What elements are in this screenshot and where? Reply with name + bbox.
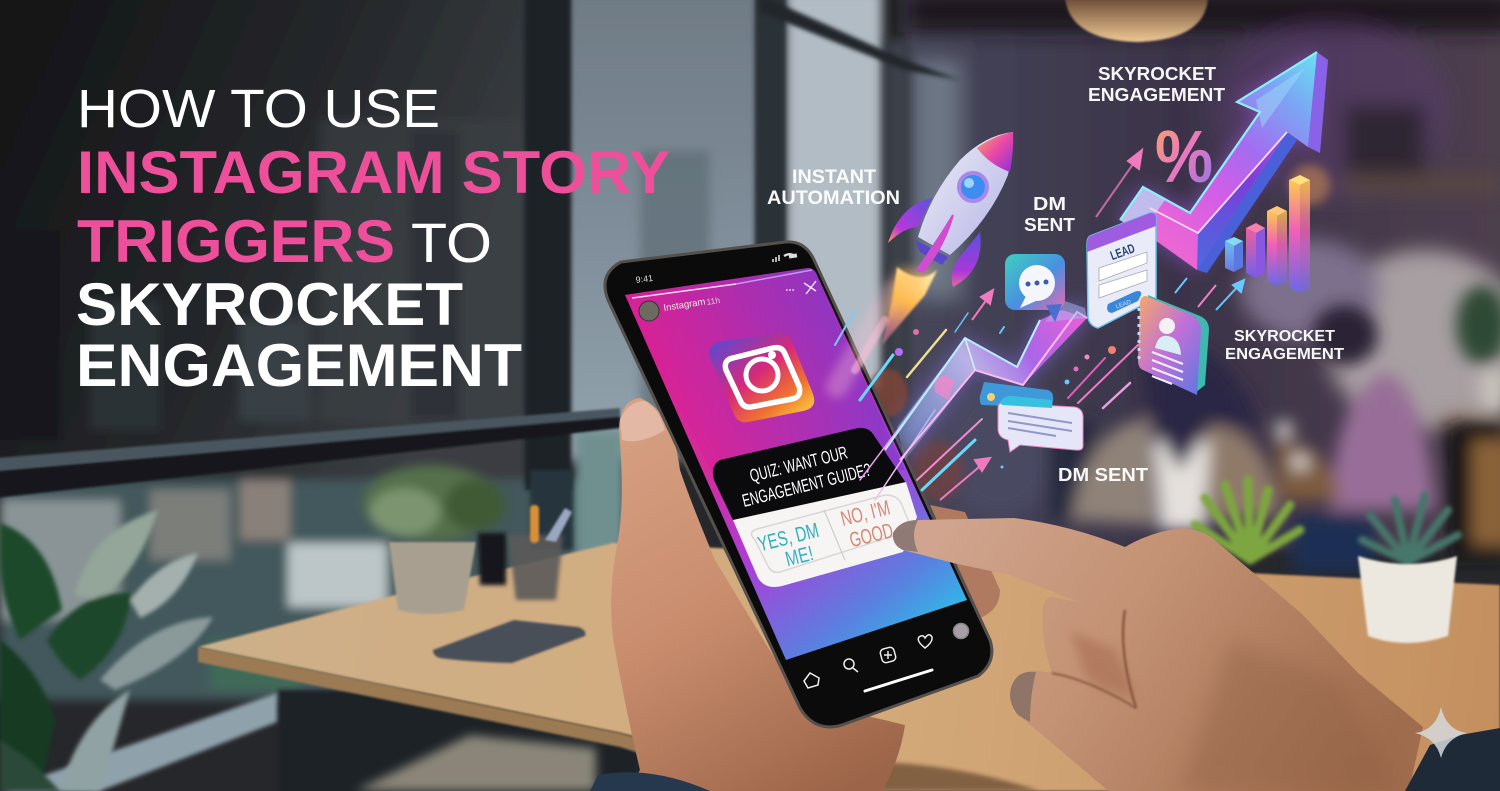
bar chart xyxy=(1225,165,1330,293)
quiz card: NO, I'M xyxy=(838,496,892,531)
left hand holding phone xyxy=(590,369,1000,791)
status bar: 9:41 xyxy=(635,273,654,285)
rocket xyxy=(888,132,1013,287)
label: skyrocket engagement lower xyxy=(1225,328,1345,363)
title: TO xyxy=(411,211,492,274)
percent symbol: % xyxy=(1155,115,1213,198)
title xyxy=(76,79,670,399)
label: skyrocket engagement lower: ENGAGEMENT xyxy=(1225,346,1345,363)
fingernail xyxy=(893,520,918,552)
status bar xyxy=(635,253,797,285)
label: dm sent upper: SENT xyxy=(1024,215,1075,235)
sparkle dots xyxy=(895,329,1116,468)
label: skyrocket engagement lower: SKYROCKET xyxy=(1234,328,1336,345)
contact book xyxy=(1138,295,1209,395)
holographic growth graphic xyxy=(835,52,1330,500)
label: dm sent upper: DM xyxy=(1033,194,1066,214)
label: instant automation: AUTOMATION xyxy=(767,188,900,209)
arrow 3D right face xyxy=(1308,52,1328,153)
small arrows xyxy=(940,150,1244,500)
table xyxy=(198,543,1500,791)
label: instant automation xyxy=(767,167,900,209)
label: dm sent upper xyxy=(1024,194,1075,235)
quiz card: QUIZ: WANT OUR xyxy=(748,442,849,486)
lead form card: LEAD xyxy=(1115,299,1133,311)
story header: Instagram xyxy=(663,296,706,314)
label: skyrocket engagement top xyxy=(1088,64,1225,105)
bottom nav icons xyxy=(804,624,968,691)
pendant lamp xyxy=(1065,0,1208,42)
story header: 11h xyxy=(706,295,721,307)
window xyxy=(959,173,987,201)
lead form card: LEAD xyxy=(1108,240,1137,263)
title: INSTAGRAM STORY xyxy=(77,139,670,206)
lower zigzag arrow band xyxy=(885,300,1087,460)
instagram logo xyxy=(709,334,814,422)
label: instant automation: INSTANT xyxy=(792,167,876,188)
title: HOW TO USE xyxy=(77,79,440,139)
quiz card: YES, DM xyxy=(756,519,821,556)
quiz card: ME! xyxy=(783,542,816,571)
label: skyrocket engagement top: SKYROCKET xyxy=(1098,64,1216,84)
sparkle watermark xyxy=(1415,707,1467,758)
title: ENGAGEMENT xyxy=(76,332,522,399)
nose cone xyxy=(977,132,1013,172)
right fin xyxy=(952,232,981,287)
rocket flame xyxy=(882,267,937,345)
right hand tapping xyxy=(893,518,1500,791)
title: SKYROCKET xyxy=(76,271,463,338)
title: TRIGGERS xyxy=(77,208,395,275)
left fin xyxy=(888,198,932,243)
main rising arrow xyxy=(1120,52,1328,273)
label: skyrocket engagement top: ENGAGEMENT xyxy=(1088,85,1225,105)
phone screen xyxy=(625,268,967,660)
quiz card: ENGAGEMENT GUIDE? xyxy=(740,460,873,511)
phone body xyxy=(605,242,992,727)
lead form card xyxy=(1087,213,1156,328)
chat bubble icon xyxy=(1005,254,1087,322)
message bubbles xyxy=(980,382,1083,452)
body xyxy=(918,132,1013,255)
plants and pots xyxy=(0,465,1458,791)
label: dm sent lower: DM SENT xyxy=(1058,465,1148,485)
quiz card xyxy=(713,428,917,587)
quiz card: GOOD xyxy=(847,519,896,552)
holographic labels xyxy=(767,64,1345,485)
story header xyxy=(639,281,816,321)
phone xyxy=(605,242,992,727)
motion streaks xyxy=(835,290,1138,500)
